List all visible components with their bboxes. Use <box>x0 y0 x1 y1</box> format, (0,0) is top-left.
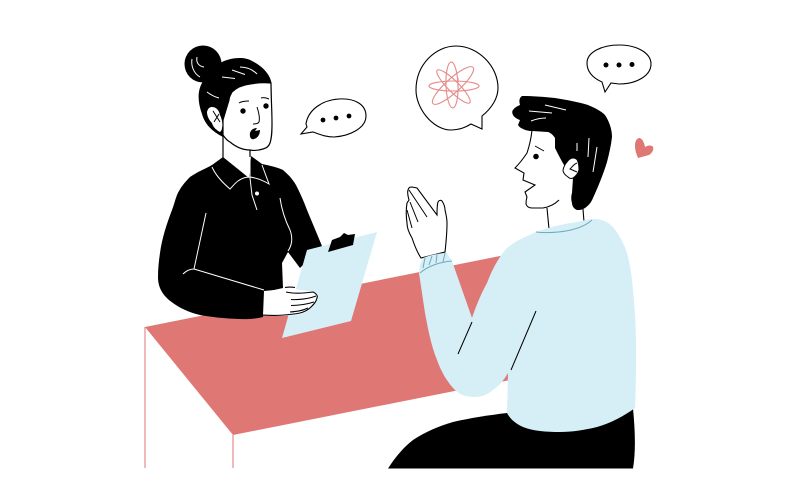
woman: hair bun <box>184 46 222 82</box>
man: hair <box>512 96 612 210</box>
man: trousers <box>388 408 635 468</box>
icon: atom scribble <box>428 62 479 109</box>
clipboard clip <box>328 233 355 252</box>
woman: clothing details <box>183 157 292 290</box>
woman: hair <box>199 58 272 137</box>
desk <box>145 255 510 468</box>
clipboard <box>282 232 377 338</box>
man: face outline <box>515 130 559 208</box>
woman <box>158 46 322 319</box>
woman: ear detail <box>213 111 220 122</box>
icon: heart <box>635 138 653 158</box>
man: sweater <box>419 219 636 432</box>
man: neck <box>547 208 586 232</box>
man: ear detail <box>570 163 577 172</box>
woman: ear <box>207 107 222 132</box>
man: eye and brow <box>533 146 544 159</box>
woman: facial features <box>239 98 269 139</box>
speech bubble: woman <box>301 99 366 137</box>
woman: torso and arms <box>158 156 322 319</box>
speech bubble: atom <box>416 46 498 130</box>
woman: fingers <box>263 287 317 315</box>
speech bubble: man <box>587 45 651 92</box>
woman: face <box>223 83 272 150</box>
man <box>388 96 636 468</box>
woman: hair highlights <box>192 57 257 98</box>
man: sweater details <box>420 220 592 370</box>
man: neck lines <box>547 208 584 229</box>
woman: neck lines <box>223 135 250 158</box>
man: face <box>515 130 575 208</box>
man: raised hand <box>406 187 447 258</box>
man: hair highlights <box>529 105 597 172</box>
man: ear <box>563 158 579 178</box>
woman: hand <box>263 287 317 316</box>
